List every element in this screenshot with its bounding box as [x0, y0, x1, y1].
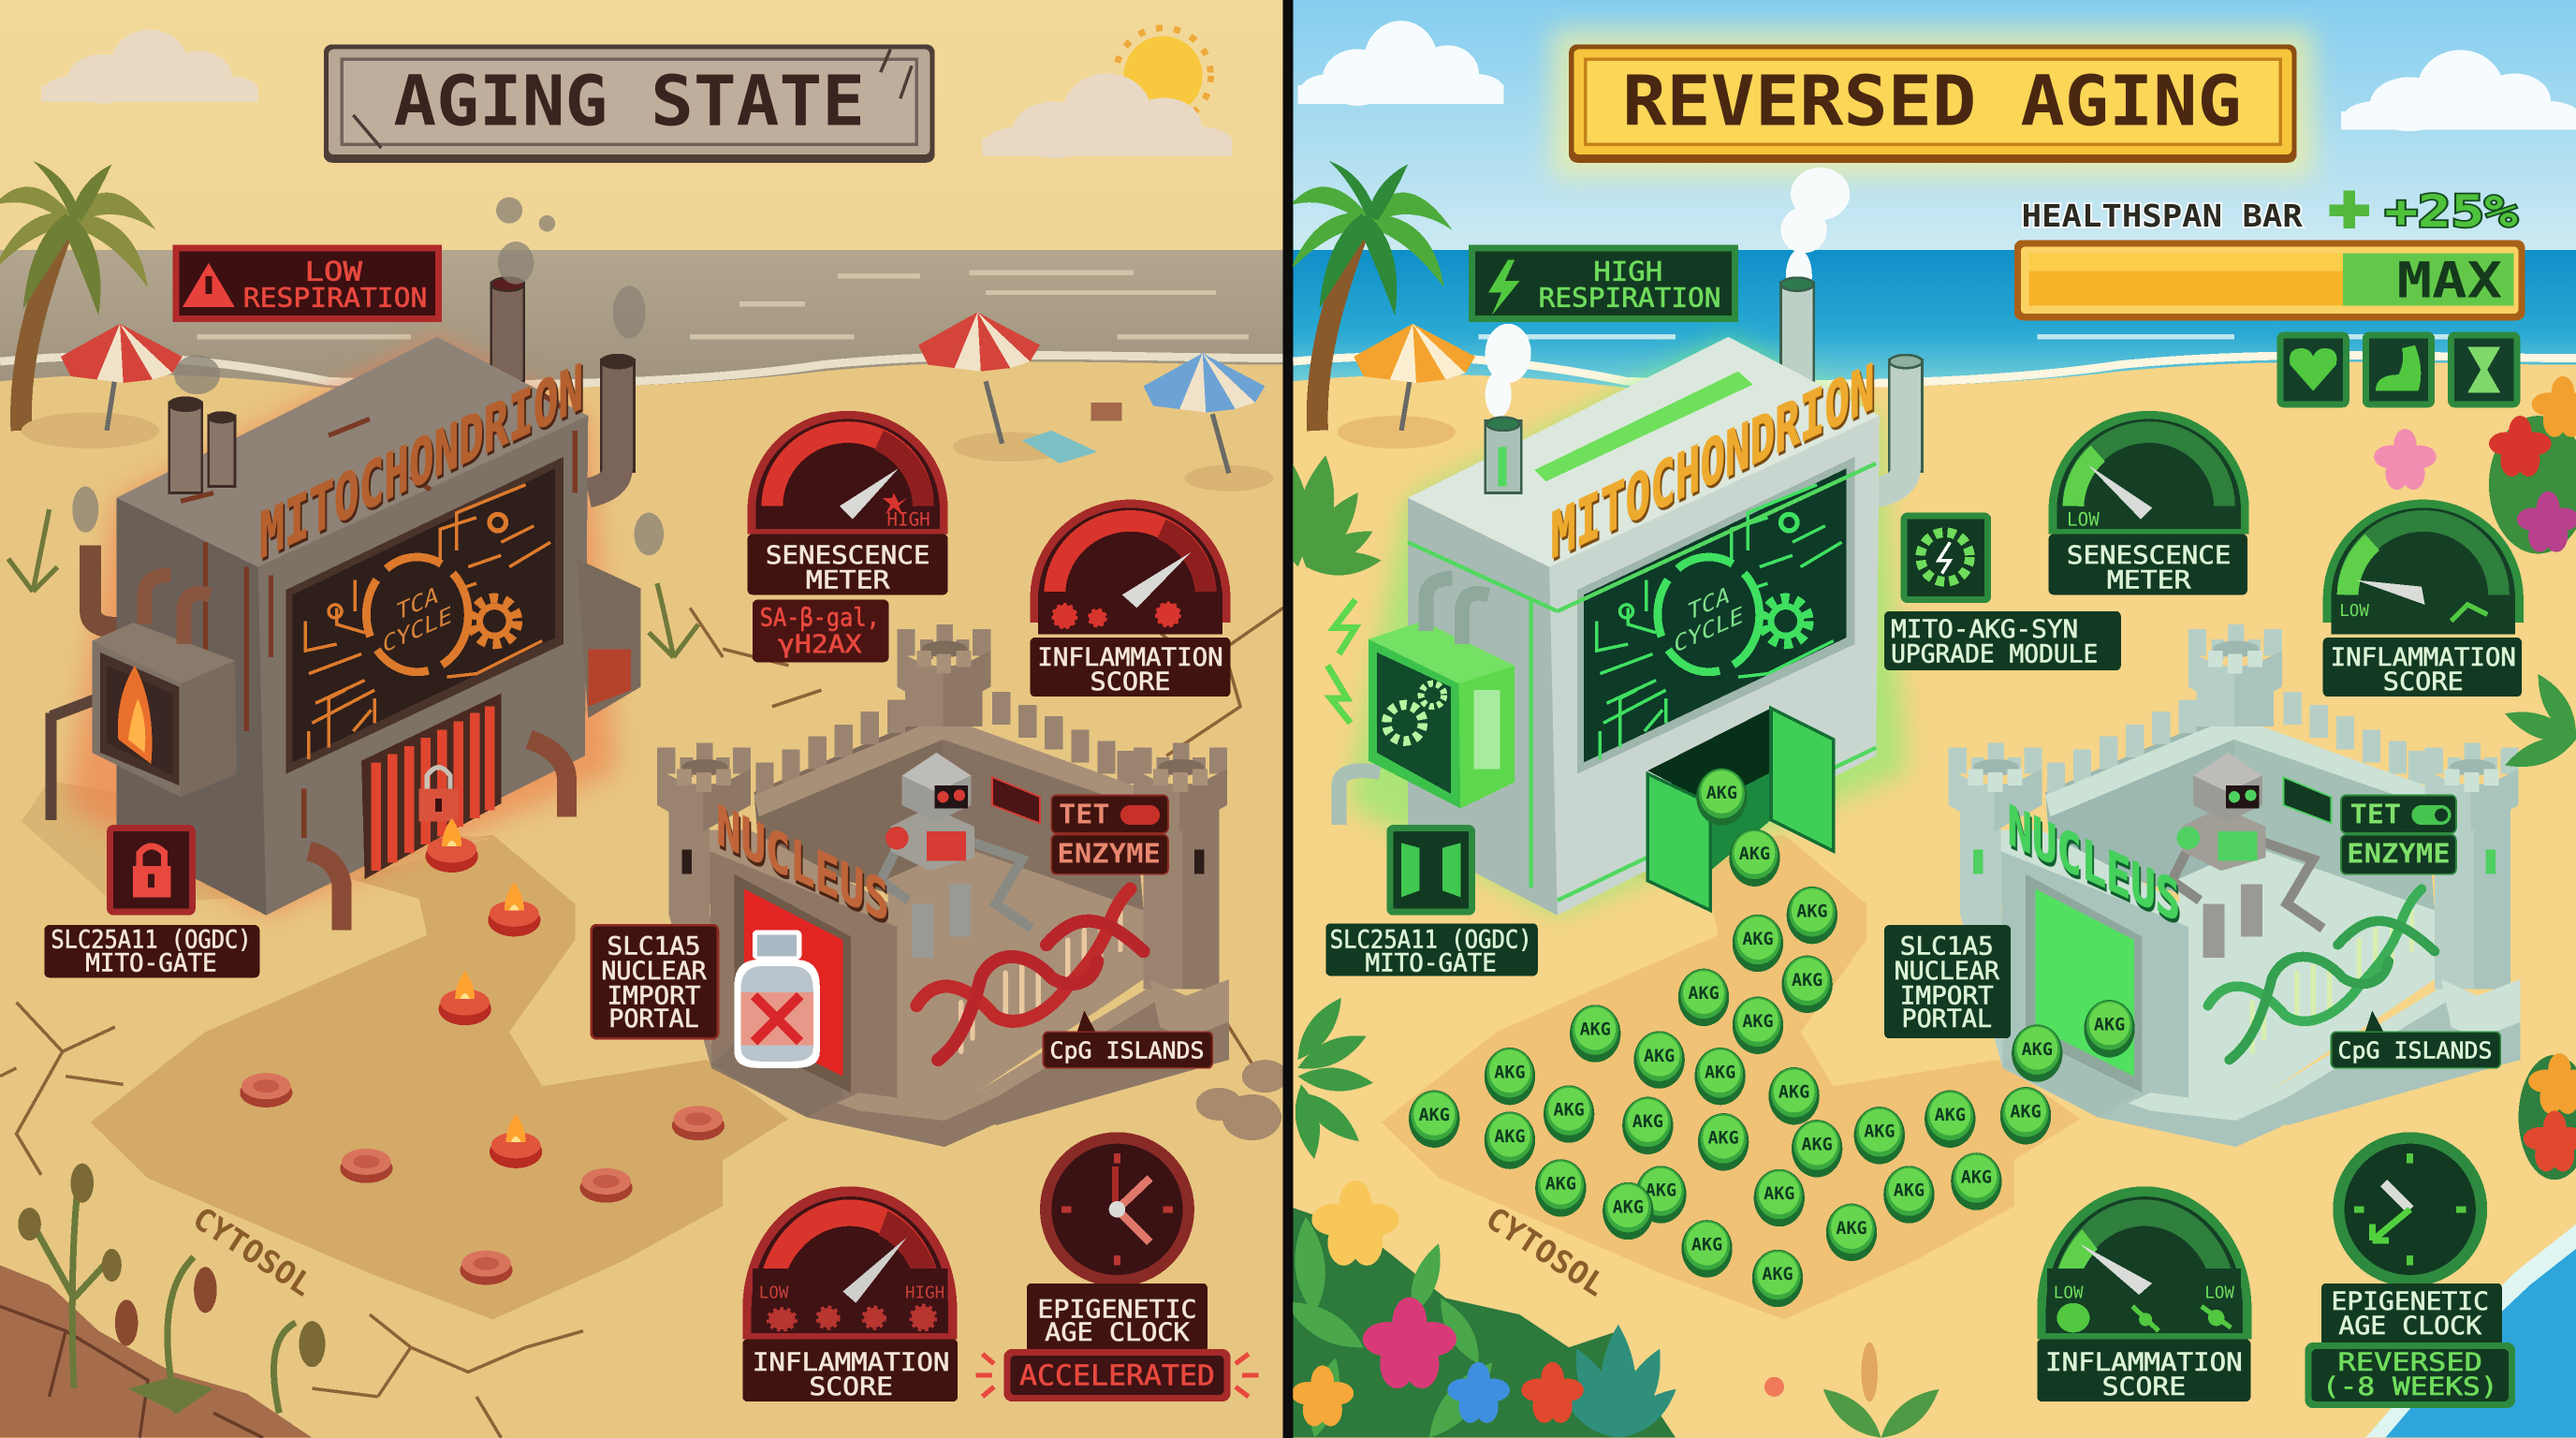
akg coin stream: AKG: [1762, 1265, 1793, 1284]
title: aging state: AGING STATE: [393, 62, 865, 141]
cytosol label: CYTOSOL: [186, 1199, 319, 1303]
akg coin stream: AKG: [1961, 1168, 1992, 1188]
high respiration sign: [1469, 245, 1738, 322]
akg coin stream: AKG: [1796, 902, 1828, 921]
upgrade gear icon: [1901, 513, 1991, 603]
label: upgrade module: MITO-AKG-SYN: [1891, 616, 2078, 644]
label: nuclear import portal: SLC1A5: [607, 933, 701, 961]
side block: [577, 559, 640, 718]
inflammation score lower: INFLAMMATION: [2045, 1349, 2243, 1377]
label: cpg islands: CpG ISLANDS: [1050, 1036, 1204, 1064]
accelerated badge: ACCELERATED: [1019, 1360, 1215, 1393]
akg coin stream: AKG: [1580, 1020, 1611, 1040]
mitochondrion building: [51, 337, 640, 930]
metabolite tokens burning: [426, 818, 542, 1168]
reversed badge: REVERSED: [2338, 1349, 2482, 1377]
icon: muscle: [2363, 332, 2435, 407]
warning triangle: [183, 263, 235, 307]
akg coin stream: AKG: [1706, 784, 1737, 803]
akg coin stream: AKG: [1764, 1184, 1794, 1204]
upgrade module box: [1339, 579, 1515, 825]
high respiration sign: HIGH: [1593, 257, 1662, 287]
senescence meter: METER: [806, 566, 890, 594]
chimney front: [1486, 418, 1521, 493]
label: nuclear import portal: NUCLEAR: [601, 958, 707, 986]
label: tet enzyme off: ENZYME: [1057, 838, 1161, 869]
label: nuclear import portal: SLC1A5: [1900, 933, 1994, 961]
aging sand: [0, 362, 1284, 1438]
palm tree: [1290, 161, 1453, 431]
bush left: [1263, 445, 1383, 579]
akg coin stream: AKG: [1739, 844, 1770, 864]
label: cpg islands: [1043, 1010, 1212, 1068]
akg coin stream: AKG: [1802, 1136, 1833, 1155]
back chimneys: [1781, 278, 1922, 493]
label: upgrade module: UPGRADE MODULE: [1891, 640, 2098, 668]
nucleus sign: NUCLEUS: [716, 794, 889, 935]
label: nuclear import portal: [1884, 925, 2011, 1038]
akg coin stream: AKG: [1894, 1181, 1925, 1201]
akg coin stream: AKG: [1494, 1127, 1526, 1147]
inflammation score upper: [2323, 500, 2524, 697]
label: mito gate: MITO-GATE: [1365, 949, 1497, 977]
reversed badge: [2305, 1343, 2515, 1408]
akg coin stream: AKG: [1705, 1063, 1735, 1082]
label: mito gate: SLC25A11 (OGDC): [51, 927, 252, 955]
respiration warning sign: [172, 245, 442, 322]
rocks: [1196, 1060, 1288, 1140]
epigenetic age clock: AGE CLOCK: [2338, 1313, 2481, 1341]
high respiration sign: RESPIRATION: [1539, 283, 1720, 314]
epigenetic age clock: [1027, 1132, 1208, 1352]
label: nuclear import portal: IMPORT: [607, 982, 701, 1010]
label: mito gate: [44, 925, 259, 977]
blocked akg bottle: [735, 930, 820, 1068]
label: mito gate: [1325, 923, 1538, 977]
inflammation score upper: SCORE: [1090, 668, 1171, 697]
cloud right: [2341, 50, 2576, 131]
title: reversed aging: REVERSED AGING: [1622, 62, 2242, 141]
chimney pipes: [91, 278, 634, 627]
label: nuclear import portal: [592, 925, 718, 1038]
akg coin stream: AKG: [1419, 1106, 1450, 1125]
healthspan bar: +25%: [2385, 186, 2518, 238]
label: nuclear import portal: IMPORT: [1900, 982, 1994, 1010]
mito gate lock icon: [107, 825, 196, 916]
reversed sea: [1293, 250, 2576, 389]
title: reversed aging: [1569, 44, 2297, 163]
healthspan bar: [2014, 186, 2525, 320]
cloud left: [41, 30, 258, 104]
vent light: [1534, 372, 1753, 481]
reversed cytosol path: [1382, 835, 2080, 1319]
robot: [2172, 753, 2323, 958]
biomarkers label: [753, 600, 889, 662]
senescence meter: SENESCENCE: [766, 542, 929, 570]
akg coin stream: AKG: [1644, 1047, 1675, 1066]
icon: hourglass: [2448, 332, 2520, 407]
robot: [881, 753, 1032, 958]
accelerated badge: [976, 1349, 1258, 1401]
senescence meter: HIGH: [886, 509, 930, 531]
epigenetic age clock: [2321, 1132, 2502, 1345]
akg coin stream: AKG: [1545, 1175, 1576, 1195]
inflammation score upper: INFLAMMATION: [2331, 644, 2516, 672]
inflammation score upper: LOW: [2339, 602, 2369, 621]
beach umbrella red: [22, 324, 183, 448]
divider: [1283, 0, 1293, 1438]
label: tet enzyme on: [2341, 795, 2456, 874]
flower bush right: [2374, 376, 2576, 553]
nucleus castle: [657, 624, 1229, 1147]
icon: heart: [2277, 332, 2349, 407]
akg coin stream: AKG: [1742, 930, 1774, 949]
sun: [1116, 28, 1211, 124]
epigenetic age clock: EPIGENETIC: [1037, 1297, 1197, 1325]
akg coin stream: AKG: [1632, 1112, 1663, 1132]
reversed badge: (-8 WEEKS): [2322, 1373, 2498, 1401]
nucleus sign: NUCLEUS: [2008, 794, 2180, 935]
green edge lines: [1408, 463, 1876, 901]
cytosol label: CYTOSOL: [1479, 1199, 1612, 1303]
senescence meter: SENESCENCE: [2067, 542, 2231, 570]
senescence meter: [2049, 411, 2249, 594]
label: upgrade module: [1884, 611, 2121, 670]
open gate: [1647, 708, 1834, 910]
cloud right: [983, 73, 1232, 158]
nucleus castle renewed: [1949, 624, 2520, 1147]
label: tet enzyme on: ENZYME: [2347, 838, 2451, 869]
biomarkers label: SA-β-gal,: [760, 605, 880, 633]
akg coin stream: AKG: [1688, 984, 1720, 1004]
respiration warning sign: LOW: [305, 257, 362, 287]
trash items: [1022, 403, 1122, 463]
akg coin stream: AKG: [1691, 1236, 1722, 1255]
label: nuclear import portal: PORTAL: [1902, 1005, 1992, 1034]
dna helix green: [2208, 889, 2435, 1060]
akg coin stream: AKG: [1792, 971, 1822, 990]
green glow around mitochondrion: [1347, 337, 1906, 916]
epigenetic age clock: EPIGENETIC: [2331, 1288, 2489, 1316]
akg coin stream: [1409, 769, 2135, 1307]
mitochondrion building renewed: [1408, 337, 1880, 916]
label: tet enzyme off: [1051, 795, 1168, 874]
cytosol path: [91, 835, 788, 1319]
panel: reversed aging: [1263, 0, 2576, 1438]
lower pipes: [309, 740, 567, 930]
inflammation score upper: INFLAMMATION: [1037, 644, 1223, 672]
inflammation score lower: [742, 1186, 958, 1401]
inflammation score upper: SCORE: [2383, 668, 2464, 697]
tca cycle label: TCA: [1688, 581, 1730, 627]
icon: lightning: [1488, 259, 1519, 315]
inflammation score lower: SCORE: [2102, 1373, 2186, 1401]
tca cycle label: TCA: [397, 581, 438, 627]
epigenetic age clock: AGE CLOCK: [1045, 1319, 1190, 1347]
inflammation score upper: [1030, 500, 1231, 697]
akg coin stream: AKG: [1707, 1129, 1739, 1149]
cracked soil: [0, 1265, 312, 1438]
panel: aging state: [0, 0, 1288, 1438]
aging sea: [0, 250, 1284, 389]
label: mito gate: MITO-GATE: [85, 949, 217, 977]
inflammation score lower: LOW: [759, 1284, 789, 1303]
beach umbrella red right: [918, 313, 1050, 462]
dead plant: [8, 509, 698, 657]
inflammation score lower: [2037, 1186, 2251, 1401]
akg coin stream: AKG: [1553, 1101, 1585, 1121]
tca cycle label: CYCLE: [383, 601, 452, 659]
lush foliage bottom left: [1278, 1181, 1946, 1438]
smoke puffs: [72, 198, 664, 555]
title: aging state: [324, 44, 935, 163]
starfish: [1764, 1377, 1784, 1397]
reversed sand: [1293, 362, 2576, 1438]
top chimneys: [169, 398, 235, 493]
furnace box: [51, 575, 237, 820]
rust stain drips: [181, 394, 575, 838]
inflammation score lower: HIGH: [905, 1284, 944, 1303]
akg coin stream: AKG: [1646, 1181, 1676, 1201]
akg coin stream: AKG: [1836, 1219, 1867, 1239]
aging sky: [0, 0, 1284, 252]
inflammation score lower: LOW: [2204, 1284, 2234, 1303]
reversed sky: [1293, 0, 2576, 252]
akg coin stream: AKG: [2010, 1102, 2042, 1122]
respiration warning sign: RESPIRATION: [243, 283, 427, 314]
label: mito gate: SLC25A11 (OGDC): [1330, 927, 1532, 955]
akg coin stream: AKG: [1864, 1123, 1895, 1142]
locked red gate: [361, 694, 501, 879]
senescence meter: METER: [2107, 566, 2191, 594]
akg coin stream: AKG: [1613, 1197, 1644, 1217]
akg coin stream: AKG: [1742, 1012, 1774, 1032]
label: tet enzyme on: TET: [2350, 799, 2401, 829]
label: nuclear import portal: PORTAL: [608, 1005, 699, 1034]
healthspan bar: MAX: [2397, 253, 2502, 310]
biomarkers label: γH2AX: [778, 631, 862, 659]
steam plume: [1486, 168, 1850, 418]
inflammation score lower: SCORE: [809, 1373, 893, 1401]
inflammation score lower: INFLAMMATION: [753, 1349, 949, 1377]
plus icon: [2330, 191, 2369, 228]
beach umbrella blue: [1144, 353, 1273, 492]
label: tet enzyme off: TET: [1059, 799, 1110, 829]
wilted plants: [18, 1164, 326, 1413]
mitochondrion sign: MITOCHONDRION: [1551, 350, 1875, 574]
akg coin stream: AKG: [2094, 1015, 2125, 1034]
senescence meter: LOW: [2067, 509, 2100, 531]
mitochondrion sign text: MITOCHONDRION: [259, 350, 583, 574]
title glow: [1553, 30, 2313, 178]
needle: [840, 468, 899, 520]
inflammation score lower: LOW: [2054, 1284, 2084, 1303]
tca cycle label: CYCLE: [1674, 601, 1743, 659]
tca cycle label: [384, 588, 451, 651]
cloud left: [1298, 21, 1504, 106]
healthspan bar: HEALTHSPAN BAR: [2022, 198, 2304, 234]
gate open icon: [1386, 825, 1475, 916]
open portal: [2026, 874, 2143, 1093]
ground cracks: [0, 608, 1283, 1438]
akg coin stream: AKG: [1778, 1082, 1809, 1102]
label: nuclear import portal: NUCLEAR: [1895, 958, 1999, 986]
beach umbrella orange: [1338, 324, 1475, 448]
dna helix red: [916, 889, 1144, 1060]
akg coin stream: AKG: [1494, 1063, 1526, 1082]
palm leaves left: [1288, 991, 1374, 1161]
label: cpg islands: [2331, 1010, 2500, 1068]
palm tree: [0, 161, 156, 431]
akg coin stream: AKG: [1935, 1106, 1966, 1125]
metabolite tokens depleted: [240, 1073, 724, 1285]
water corner: [2365, 1225, 2576, 1438]
energy sparks: [1327, 600, 1355, 723]
portal red: [735, 874, 851, 1093]
red glow around mitochondrion: [66, 337, 616, 916]
label: cpg islands: CpG ISLANDS: [2338, 1036, 2492, 1064]
senescence meter: [748, 411, 948, 594]
akg coin stream: AKG: [2022, 1040, 2053, 1060]
flower bush lower right: [2501, 668, 2576, 1180]
